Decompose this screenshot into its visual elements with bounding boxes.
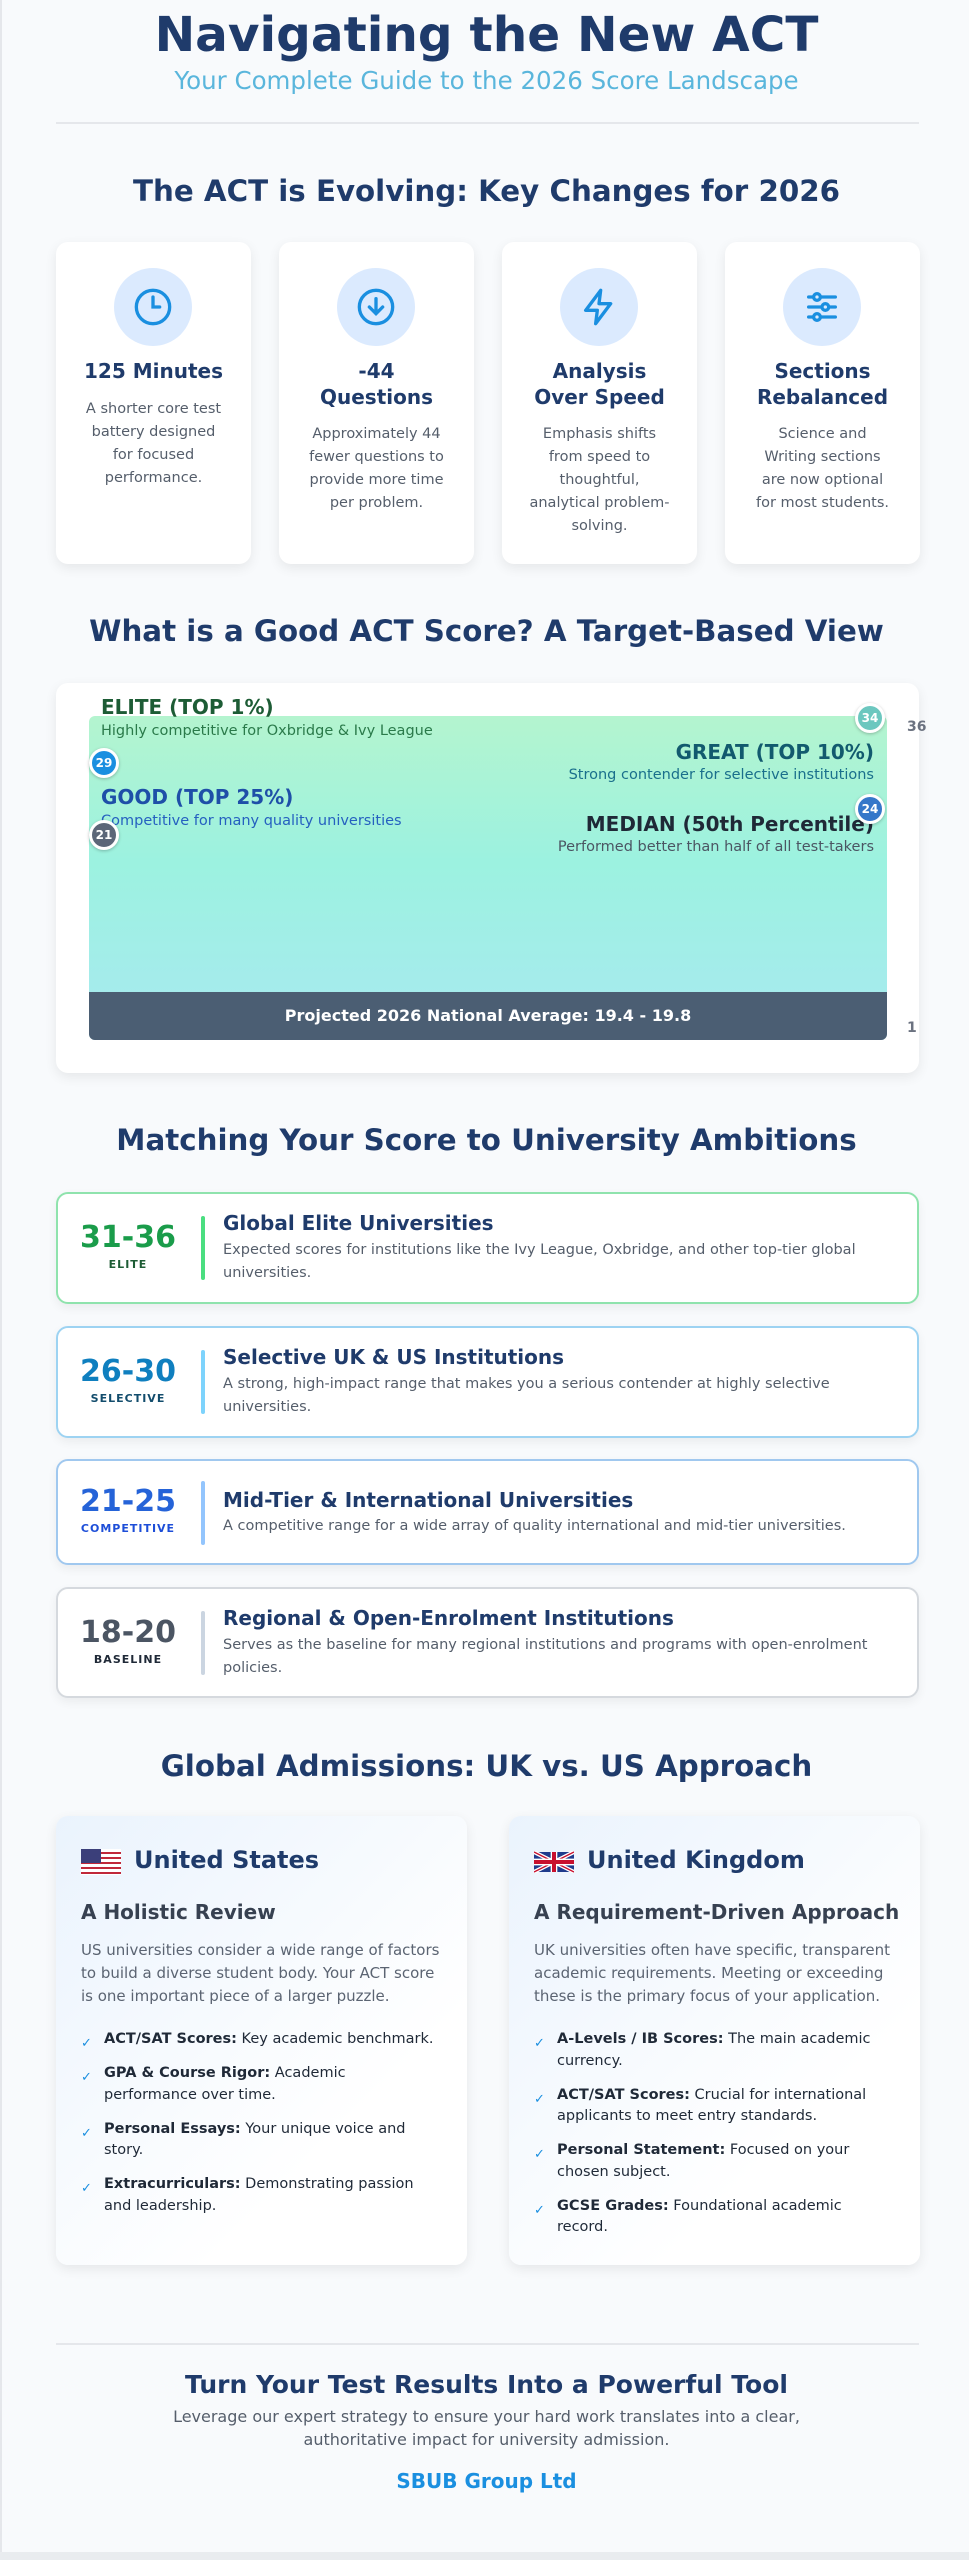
checklist: UK: chosen subject. <box>557 2164 670 2180</box>
card: analysis <box>502 242 697 564</box>
chart: score target <box>56 683 919 1073</box>
card: 125 minutes: battery designed <box>92 424 215 440</box>
chart: score target: 1 <box>907 1020 917 1036</box>
checklist: UK <box>536 2031 871 2235</box>
panel: united kingdom: A Requirement-Driven Approach <box>534 1900 899 1924</box>
panel: united states: United States <box>134 1846 319 1874</box>
checklist: US: Extracurriculars: Demonstrating passion <box>104 2176 414 2192</box>
card: analysis: Emphasis shifts <box>543 426 656 442</box>
panel: united kingdom: UK universities often have specific, transparent academic requirements. Meeting or exceeding these is the primary focus of your application. <box>534 1941 890 2005</box>
footer: call to action: Leverage our expert strategy to ensure your hard work translates into a clear, <box>173 2407 800 2426</box>
checklist: US: GPA & Course Rigor: Academic <box>104 2065 346 2081</box>
card: -44 questions: per problem. <box>330 495 423 511</box>
footer: call to action <box>173 2370 800 2493</box>
checklist: US: performance over time. <box>104 2086 276 2102</box>
tier: competitive: COMPETITIVE <box>81 1522 175 1535</box>
national average bar <box>89 992 887 1040</box>
card: -44 questions: -44 <box>358 359 395 383</box>
card: sections: Science and <box>778 426 867 442</box>
checklist: US: ACT/SAT Scores: Key academic benchmark. <box>104 2031 434 2047</box>
tier: selective <box>56 1326 919 1438</box>
label: median: MEDIAN (50th Percentile) <box>586 812 874 836</box>
card: analysis: solving. <box>571 518 628 534</box>
checklist: US <box>83 2031 434 2214</box>
title: Navigating the New ACT <box>155 7 818 63</box>
icon: clock <box>114 268 192 346</box>
card: -44 questions: fewer questions to <box>309 449 444 465</box>
tier: baseline <box>56 1587 919 1698</box>
card: analysis: analytical problem- <box>529 495 670 511</box>
icon: UK flag <box>534 1851 574 1873</box>
checklist: UK: Personal Statement: Focused on your <box>557 2142 849 2158</box>
label: good: GOOD (TOP 25%) <box>101 785 293 809</box>
card: analysis: thoughtful, <box>560 472 639 488</box>
tier: baseline: BASELINE <box>94 1653 162 1666</box>
label: great: GREAT (TOP 10%) <box>676 740 874 764</box>
chart: score target: Strong contender for selective institutions <box>569 767 874 783</box>
heading: matching: Matching Your Score to University Ambitions <box>116 1123 857 1157</box>
chart: score target: 24 <box>862 802 878 816</box>
heading: good score: What is a Good ACT Score? A Target-Based View <box>89 614 884 648</box>
card: sections: are now optional <box>762 472 883 488</box>
footer: call to action: authoritative impact for university admission. <box>304 2430 669 2449</box>
tier: competitive: 21-25 <box>80 1484 176 1519</box>
tier: competitive <box>56 1459 919 1565</box>
tier: elite: 31-36 <box>80 1220 176 1255</box>
tier: elite: Global Elite Universities <box>223 1211 494 1235</box>
checklist: UK: applicants to meet entry standards. <box>557 2108 817 2124</box>
national average bar: Projected 2026 National Average: 19.4 - 19.8 <box>285 1006 691 1025</box>
card: -44 questions: provide more time <box>310 472 444 488</box>
card: sections: for most students. <box>756 495 889 511</box>
badges: 34 <box>862 711 878 725</box>
panel: united states <box>56 1816 467 2265</box>
checklist: UK: ACT/SAT Scores: Crucial for international <box>557 2086 866 2102</box>
icon: US flag <box>81 1849 121 1875</box>
card: analysis: Analysis <box>553 359 646 383</box>
card: -44 questions: Questions <box>320 385 433 409</box>
checklist: US: story. <box>104 2142 143 2158</box>
tier: selective: Selective UK & US Institutions <box>223 1345 564 1369</box>
card: 125 minutes <box>56 242 251 564</box>
card: 125 minutes: for focused <box>113 447 194 463</box>
card: sections <box>725 242 920 564</box>
icon: lightning <box>560 268 638 346</box>
panel: united states: US universities consider a wide range of factors to build a diverse student body. Your ACT score is one important piece of a larger puzzle. <box>81 1941 439 2005</box>
heading: global admissions: Global Admissions: UK vs. US Approach <box>161 1749 812 1783</box>
tier: competitive: Mid-Tier & International Universities <box>223 1488 633 1512</box>
badges <box>855 703 885 733</box>
panel: united kingdom <box>509 1816 920 2265</box>
card: sections: Writing sections <box>764 449 881 465</box>
icon: arrow down <box>337 268 415 346</box>
chart: score target: Highly competitive for Oxbridge & Ivy League <box>101 723 433 739</box>
footer: call to action: Turn Your Test Results Into a Powerful Tool <box>185 2370 788 2399</box>
checklist: UK: currency. <box>557 2052 623 2068</box>
card: -44 questions <box>279 242 474 564</box>
subtitle: Your Complete Guide to the 2026 Score Landscape <box>174 66 799 95</box>
label: elite: ELITE (TOP 1%) <box>101 695 274 719</box>
card: sections: Rebalanced <box>757 385 888 409</box>
checklist: US: Personal Essays: Your unique voice and <box>104 2120 406 2136</box>
tier: elite: Expected scores for institutions like the Ivy League, Oxbridge, and other top-tier global universities. <box>223 1242 856 1281</box>
tier: elite <box>56 1192 919 1304</box>
axis labels: 36 <box>907 719 926 735</box>
tier: selective: SELECTIVE <box>91 1392 165 1405</box>
tier: selective: A strong, high-impact range that makes you a serious contender at highly selective universities. <box>223 1376 830 1415</box>
tier: elite: ELITE <box>109 1258 147 1271</box>
tier: selective: 26-30 <box>80 1354 176 1389</box>
heading: key changes: The ACT is Evolving: Key Changes for 2026 <box>133 174 840 208</box>
chart: score target: Performed better than half of all test-takers <box>558 839 874 855</box>
panel: united states: A Holistic Review <box>81 1900 276 1924</box>
chart: score target: 29 <box>96 756 112 770</box>
card: -44 questions: Approximately 44 <box>312 426 441 442</box>
tier: baseline: Regional & Open-Enrolment Institutions <box>223 1606 674 1630</box>
card: analysis: from speed to <box>549 449 650 465</box>
panel: united kingdom: United Kingdom <box>587 1846 805 1874</box>
chart: score target: Competitive for many quality universities <box>101 813 402 829</box>
tier: baseline: 18-20 <box>80 1615 176 1650</box>
card: analysis: Over Speed <box>534 385 665 409</box>
checklist: UK: GCSE Grades: Foundational academic <box>557 2198 842 2214</box>
chart: score target: 21 <box>96 828 112 842</box>
checklist: UK: A-Levels / IB Scores: The main academic <box>557 2031 871 2047</box>
footer: call to action: SBUB Group Ltd <box>396 2469 577 2493</box>
checklist: US: and leadership. <box>104 2198 216 2214</box>
icon: sliders <box>783 268 861 346</box>
card: 125 minutes: performance. <box>105 470 202 486</box>
checklist: UK: record. <box>557 2219 608 2235</box>
tier: baseline: Serves as the baseline for many regional institutions and programs with open-enrolment policies. <box>223 1637 867 1676</box>
tier: competitive: A competitive range for a wide array of quality international and mid-tier universities. <box>223 1518 846 1534</box>
card: 125 minutes: 125 Minutes <box>84 359 223 383</box>
card: 125 minutes: A shorter core test <box>86 401 221 417</box>
card: sections: Sections <box>774 359 871 383</box>
